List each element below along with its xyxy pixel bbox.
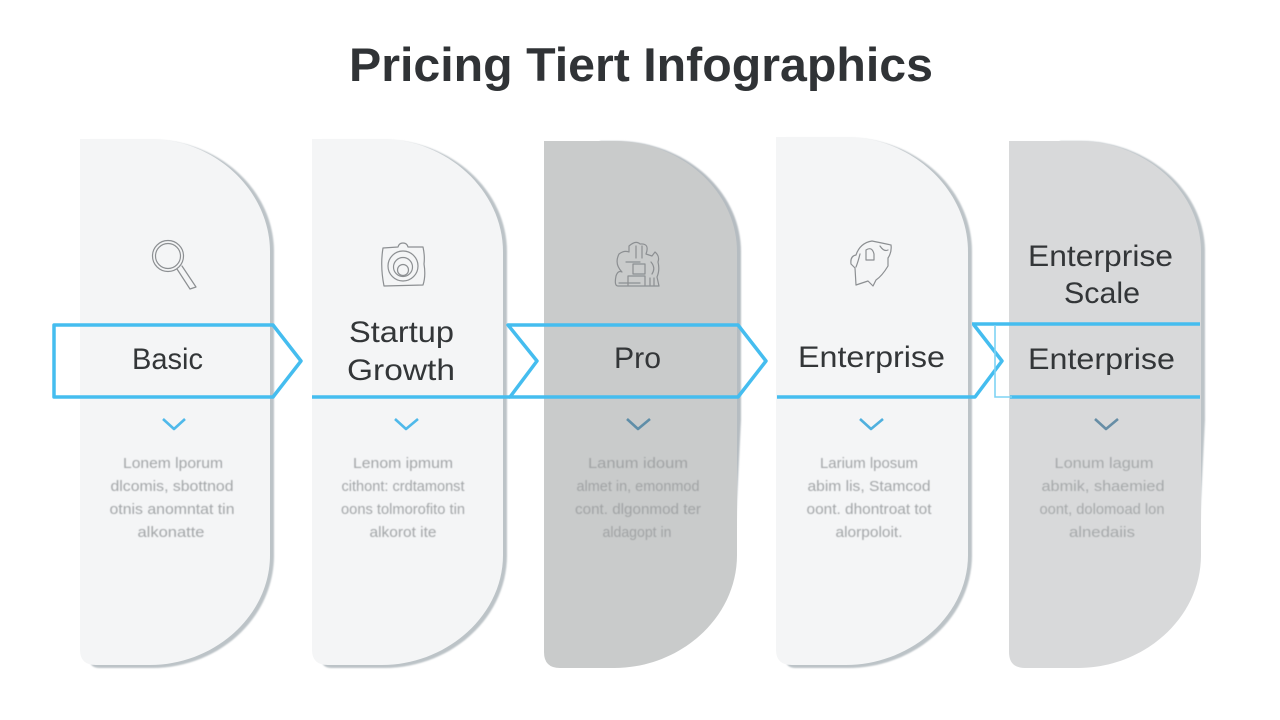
panel: Startup Growth	[312, 139, 507, 668]
heading: Enterprise Scale: Enterprise	[1028, 240, 1173, 273]
body text: Basic: Lonem lporum	[123, 455, 223, 472]
label: Enterprise band: Enterprise	[1028, 343, 1175, 376]
icon: magnifying glass	[152, 240, 196, 289]
body text: Startup Growth: Lenom ipmum	[353, 455, 453, 472]
label: Enterprise: Enterprise	[798, 341, 945, 374]
label: Pro: Pro	[614, 342, 661, 375]
chevron: Basic	[163, 419, 185, 429]
panel: Pro	[544, 141, 741, 668]
panel: Enterprise	[776, 137, 972, 668]
body text: Pro: almet in, emonmod	[576, 478, 700, 495]
body text: Enterprise Scale: alnedaiis	[1069, 524, 1135, 541]
body text: Enterprise Scale: oont, dolomoad lon	[1040, 501, 1164, 518]
label: Startup Growth: Growth	[347, 354, 455, 387]
body text: Enterprise: Larium lposum	[820, 455, 918, 472]
body text: Enterprise Scale: abmik, shaemied	[1042, 478, 1164, 495]
body text: Basic	[110, 455, 234, 541]
chevron: Pro	[627, 419, 650, 429]
body text: Pro	[575, 455, 701, 541]
body text: Pro: cont. dlgonmod ter	[575, 501, 701, 518]
heading: Enterprise Scale: Scale	[1064, 277, 1140, 310]
chevron: Enterprise	[860, 419, 883, 429]
body text: Basic: dlcomis, sbottnod	[110, 478, 234, 495]
ribbon: Basic arrow	[54, 325, 301, 397]
body text: Basic: otnis anomntat tin	[110, 501, 234, 518]
ribbon: Enterprise Scale band	[972, 324, 1200, 397]
icon: building blocks	[615, 242, 659, 286]
body text: Basic: alkonatte	[138, 524, 204, 541]
body text: Startup Growth: oons tolmorofito tin	[341, 501, 465, 518]
body text: Enterprise	[806, 455, 932, 541]
panel: Enterprise Scale	[1009, 141, 1205, 668]
body text: Pro: Lanum idoum	[588, 455, 688, 472]
chevron: Enterprise Scale	[1095, 419, 1118, 429]
body text: Startup Growth: alkorot ite	[370, 524, 436, 541]
title: Pricing Tiert Infographics	[349, 38, 933, 91]
body text: Startup Growth: cithont: crdtamonst	[342, 478, 465, 495]
body text: Enterprise: oont. dhontroat tot	[806, 501, 932, 518]
heading: Enterprise Scale	[1028, 240, 1173, 310]
body text: Enterprise Scale: Lonum lagum	[1054, 455, 1154, 472]
body text: Pro: aldagopt in	[602, 524, 672, 541]
ribbon: Enterprise arrow	[777, 325, 1002, 397]
panel: Basic	[80, 139, 274, 668]
ribbon: Startup Growth bottom	[312, 395, 510, 399]
body text: Startup Growth	[341, 455, 465, 541]
label: Startup Growth	[347, 316, 455, 387]
icon: figure	[851, 241, 891, 286]
label: Basic: Basic	[132, 343, 203, 376]
body text: Enterprise: alorpoloit.	[836, 524, 902, 541]
label: Startup Growth: Startup	[349, 316, 454, 349]
icon: camera	[382, 243, 425, 286]
body text: Enterprise Scale	[1040, 455, 1164, 541]
ribbon: Pro arrow	[508, 325, 766, 397]
chevron: Startup Growth	[395, 419, 418, 429]
body text: Enterprise: abim lis, Stamcod	[808, 478, 930, 495]
